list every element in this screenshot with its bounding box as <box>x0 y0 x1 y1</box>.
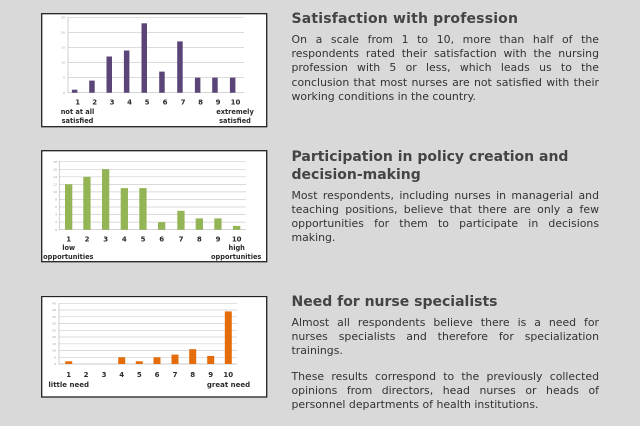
heading: participation: decision-making <box>292 167 421 183</box>
panel: specialists bar chart: 6 <box>155 371 160 379</box>
panel: participation bar chart: 8 <box>55 198 57 202</box>
panel: satisfaction bar chart: 8 <box>198 98 203 106</box>
panel: participation bar chart: 4 <box>55 212 57 216</box>
panel: participation bar chart: 5 <box>141 236 146 244</box>
panel: satisfaction bar chart: 2 <box>92 98 97 106</box>
text: specialists detail: personnel departments of health institutions. <box>292 398 538 411</box>
panel: specialists bar chart: 30 <box>52 322 56 326</box>
text: satisfaction: conclusion that most nurses are not satisfied with their <box>292 76 599 89</box>
panel: participation bar chart: high <box>229 244 245 252</box>
panel: satisfaction bar chart: extremely <box>216 108 254 116</box>
text: satisfaction: respondents rated their satisfaction with the nursing <box>292 47 599 60</box>
text: satisfaction: working conditions in the country. <box>292 90 476 103</box>
text: participation: making. <box>292 231 335 244</box>
panel: participation bar chart: 16 <box>53 168 57 172</box>
text: satisfaction: profession with 5 or less, which leads us to the <box>292 61 599 74</box>
text: participation: teaching positions, believe that there are only a few <box>292 203 599 216</box>
panel: participation bar chart: low <box>62 244 75 252</box>
panel: specialists bar chart: little need <box>48 381 89 389</box>
panel: satisfaction bar chart: 1 <box>75 98 80 106</box>
panel: satisfaction bar chart: 10 <box>61 60 65 64</box>
panel: participation bar chart: 14 <box>53 175 57 179</box>
panel: specialists bar chart: 45 <box>52 302 56 306</box>
panel: participation bar chart: 6 <box>159 236 164 244</box>
panel: participation bar chart: 10 <box>232 236 242 244</box>
panel: satisfaction bar chart: 4 <box>127 98 132 106</box>
panel: participation bar chart: 0 <box>55 228 57 232</box>
panel: participation bar chart: 8 <box>197 236 202 244</box>
panel: participation bar chart: 12 <box>53 182 57 186</box>
text: specialists intro <box>292 316 599 357</box>
panel: participation bar chart: 18 <box>53 160 57 164</box>
panel: participation bar chart: 10 <box>53 190 57 194</box>
panel: specialists bar chart: 35 <box>52 315 56 319</box>
panel: specialists bar chart: 10 <box>223 371 233 379</box>
panel: participation bar chart: 2 <box>85 236 90 244</box>
panel: participation bar chart: opportunities <box>211 253 261 261</box>
panel: specialists bar chart: 20 <box>52 335 56 339</box>
panel: participation bar chart: opportunities <box>43 253 94 261</box>
panel: satisfaction bar chart: 6 <box>163 98 168 106</box>
panel: specialists bar chart <box>41 296 268 398</box>
text: specialists intro: trainings. <box>292 344 343 357</box>
panel: specialists bar chart: 2 <box>84 371 89 379</box>
panel: participation bar chart: 6 <box>55 205 57 209</box>
panel: specialists bar chart: great need <box>207 381 250 389</box>
panel: specialists bar chart: 15 <box>52 342 56 346</box>
text: specialists detail: These results correspond to the previously collected <box>292 370 599 383</box>
panel: satisfaction bar chart: 0 <box>63 91 65 95</box>
panel: participation bar chart: 2 <box>55 220 57 224</box>
panel: specialists bar chart: 7 <box>173 371 178 379</box>
panel: specialists bar chart: 0 <box>54 362 56 366</box>
panel: satisfaction bar chart: 5 <box>63 76 65 80</box>
heading: satisfaction: Satisfaction with profession <box>292 11 518 27</box>
panel: satisfaction bar chart: 3 <box>110 98 115 106</box>
panel: satisfaction bar chart: 20 <box>61 30 65 34</box>
panel: specialists bar chart: 1 <box>66 371 71 379</box>
panel: specialists bar chart: 4 <box>119 371 124 379</box>
heading: participation <box>292 149 568 183</box>
panel: satisfaction bar chart: 9 <box>216 98 221 106</box>
panel: satisfaction bar chart: satisfied <box>62 117 94 125</box>
panel: specialists bar chart: 25 <box>52 328 56 332</box>
panel: satisfaction bar chart: not at all <box>61 108 94 116</box>
panel: specialists bar chart: 40 <box>52 308 56 312</box>
text: specialists detail <box>291 370 600 411</box>
panel: participation bar chart: 1 <box>66 236 71 244</box>
panel: satisfaction bar chart <box>41 13 268 128</box>
panel: specialists bar chart: 10 <box>52 348 56 352</box>
text: satisfaction: On a scale from 1 to 10, more than half of the <box>292 33 599 46</box>
panel: satisfaction bar chart: 25 <box>61 16 65 20</box>
panel: satisfaction bar chart: 5 <box>145 98 150 106</box>
panel: specialists bar chart: 5 <box>54 356 56 360</box>
panel: participation bar chart: 9 <box>216 236 221 244</box>
panel: specialists bar chart: 3 <box>102 371 107 379</box>
panel: satisfaction bar chart: 7 <box>181 98 186 106</box>
heading: participation: Participation in policy creation and <box>292 149 568 165</box>
panel: participation bar chart: 3 <box>103 236 108 244</box>
text: satisfaction <box>292 33 599 103</box>
panel: participation bar chart: 7 <box>179 236 184 244</box>
panel: specialists bar chart: 5 <box>137 371 142 379</box>
panel: satisfaction bar chart: 15 <box>61 46 65 50</box>
text: participation: Most respondents, including nurses in managerial and <box>292 189 599 202</box>
panel: satisfaction bar chart: satisfied <box>219 117 251 125</box>
panel: participation bar chart: 4 <box>122 236 127 244</box>
panel: satisfaction bar chart: 10 <box>231 98 240 106</box>
text: specialists intro: nurses specialists and therefore for specialization <box>292 330 599 343</box>
panel: specialists bar chart: 8 <box>190 371 195 379</box>
text: specialists intro: Almost all respondents believe there is a need for <box>292 316 599 329</box>
panel: participation bar chart <box>41 150 268 262</box>
heading: specialists: Need for nurse specialists <box>292 294 497 310</box>
panel: specialists bar chart: 9 <box>208 371 213 379</box>
text: specialists detail: opinions from directors, head nurses or heads of <box>292 384 599 397</box>
text: participation: opportunities for them to participate in decisions <box>292 217 599 230</box>
text: participation <box>292 189 599 244</box>
